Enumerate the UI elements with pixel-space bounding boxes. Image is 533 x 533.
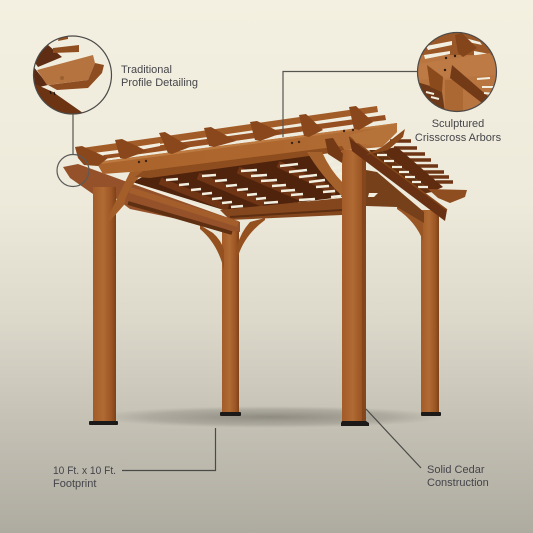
label: Sculptured [432, 118, 484, 130]
callout: sculptured crisscross arbors [283, 32, 502, 144]
bolt details [138, 129, 354, 163]
ground shadow [95, 406, 445, 428]
front left brace [107, 170, 146, 222]
back left braces [200, 218, 265, 270]
back right post [421, 210, 441, 416]
right dark beam [349, 137, 447, 221]
label second line: Footprint [53, 478, 96, 490]
callout: footprint [53, 428, 216, 490]
left long beam [63, 164, 240, 233]
inset circle: profile detail [33, 34, 112, 118]
front right post [341, 150, 369, 426]
right eave rafters [368, 141, 467, 203]
corner arbor blocks [325, 138, 343, 163]
upper slats [82, 106, 386, 159]
right side lower beam [366, 170, 424, 223]
inset circle: arbor detail [417, 32, 497, 112]
label: Crisscross Arbors [415, 132, 502, 144]
connector line [366, 409, 421, 468]
back left post [220, 228, 241, 416]
label: Traditional [121, 64, 172, 76]
pergola illustration [63, 106, 467, 426]
front right brace left [307, 152, 343, 196]
callout: solid cedar construction [366, 409, 489, 489]
rear cross beam [220, 198, 342, 220]
small locator circle [57, 154, 89, 186]
back right brace [397, 207, 423, 241]
label: Solid Cedar [427, 464, 484, 476]
underside rafters [160, 164, 336, 208]
front left post [89, 187, 118, 425]
label: Construction [427, 477, 489, 489]
sky gaps between rafters [166, 161, 343, 207]
label: Profile Detailing [121, 77, 198, 89]
connector line [72, 114, 74, 154]
connector line [122, 428, 216, 470]
callout: traditional profile detailing [33, 34, 198, 186]
roof underside [132, 152, 342, 211]
crisscross arbors [75, 106, 373, 166]
label: 10 Ft. x 10 Ft. [53, 465, 116, 477]
connector line [283, 72, 417, 137]
main front beam [96, 123, 397, 178]
